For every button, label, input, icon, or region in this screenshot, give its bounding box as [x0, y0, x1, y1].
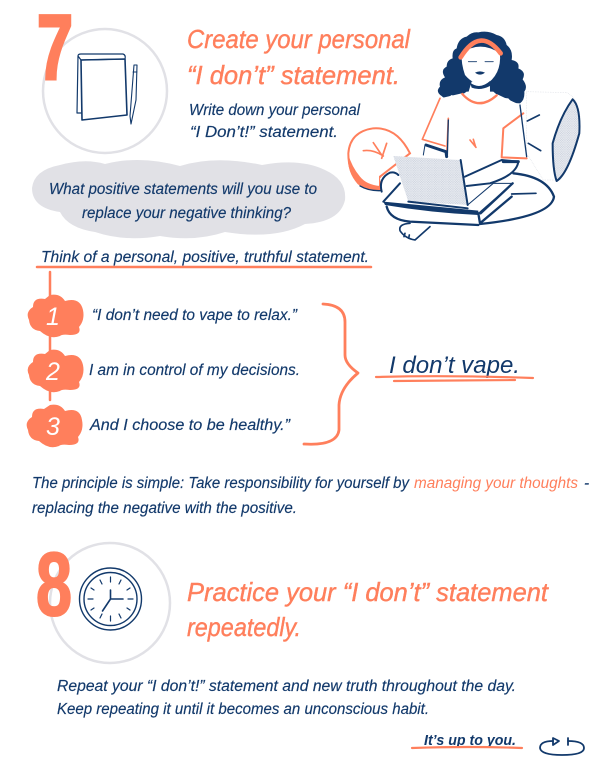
- result: I don't vape: I don’t vape.: [389, 352, 520, 379]
- text block: the principle: managing your thoughts: [414, 475, 578, 492]
- text block: write down statement: “I Don’t!” statement.: [190, 124, 338, 141]
- step 8 badge: [36, 535, 170, 663]
- step 1: “I don’t need to vape to relax.”: [92, 307, 298, 324]
- icon: repeat loop: [540, 738, 584, 755]
- callout: question cloud: [32, 160, 345, 238]
- text block: repeat statement: [57, 678, 516, 718]
- step list: [27, 295, 300, 447]
- text block: repeat statement: Repeat your “I don’t!” statement and new truth throughout the day.: [57, 678, 516, 695]
- icon: clock: [80, 568, 142, 630]
- step 2: I am in control of my decisions.: [89, 362, 300, 379]
- timeline connector: [49, 272, 51, 400]
- step 3: And I choose to be healthy.”: [89, 417, 291, 434]
- heading: step 8: [187, 577, 550, 642]
- face: [461, 41, 501, 97]
- step 1: [28, 295, 298, 337]
- illustration: woman with laptop: [348, 32, 580, 240]
- heading: step 8: repeatedly.: [187, 612, 301, 642]
- left cushion: [348, 128, 410, 191]
- icon: notepad and pencil: [77, 54, 137, 124]
- step 3: 3: [46, 413, 60, 441]
- laptop: [383, 156, 513, 223]
- step 1: 1: [46, 303, 60, 331]
- numeral 8: 8: [36, 535, 72, 635]
- closing note: It’s up to you.: [424, 732, 516, 749]
- heading: step 7: “I don’t” statement.: [187, 60, 400, 90]
- numeral 7: 7: [37, 0, 73, 99]
- heading: step 8: Practice your “I don’t” statement: [187, 577, 550, 607]
- heading: step 7: [187, 24, 411, 90]
- text block: the principle: -: [584, 475, 589, 492]
- text block: repeat statement: Keep repeating it until it becomes an unconscious habit.: [57, 701, 429, 718]
- text block: the principle: [32, 475, 589, 517]
- right pillow: [527, 92, 580, 181]
- step 7 badge: [37, 0, 167, 153]
- text block: write down statement: [189, 102, 361, 141]
- callout: question cloud: What positive statements will you use to: [49, 181, 317, 198]
- text block: the principle: replacing the negative with the positive.: [32, 500, 297, 517]
- subheading: think of a statement: Think of a personal, positive, truthful statement.: [41, 249, 369, 266]
- callout: question cloud: replace your negative thinking?: [82, 205, 291, 222]
- circle outline: [43, 29, 167, 153]
- hair: [438, 32, 526, 103]
- brace: [304, 304, 358, 444]
- text block: write down statement: Write down your personal: [189, 102, 361, 119]
- step 3: [27, 405, 291, 447]
- arm: [465, 160, 518, 186]
- legs: [380, 172, 554, 240]
- step 2: [28, 350, 300, 392]
- heading: step 7: Create your personal: [187, 24, 411, 54]
- text block: the principle: The principle is simple: Take responsibility for yourself by: [32, 475, 410, 492]
- t-shirt: [422, 93, 527, 175]
- circle outline: [50, 543, 170, 663]
- step 2: 2: [45, 358, 60, 386]
